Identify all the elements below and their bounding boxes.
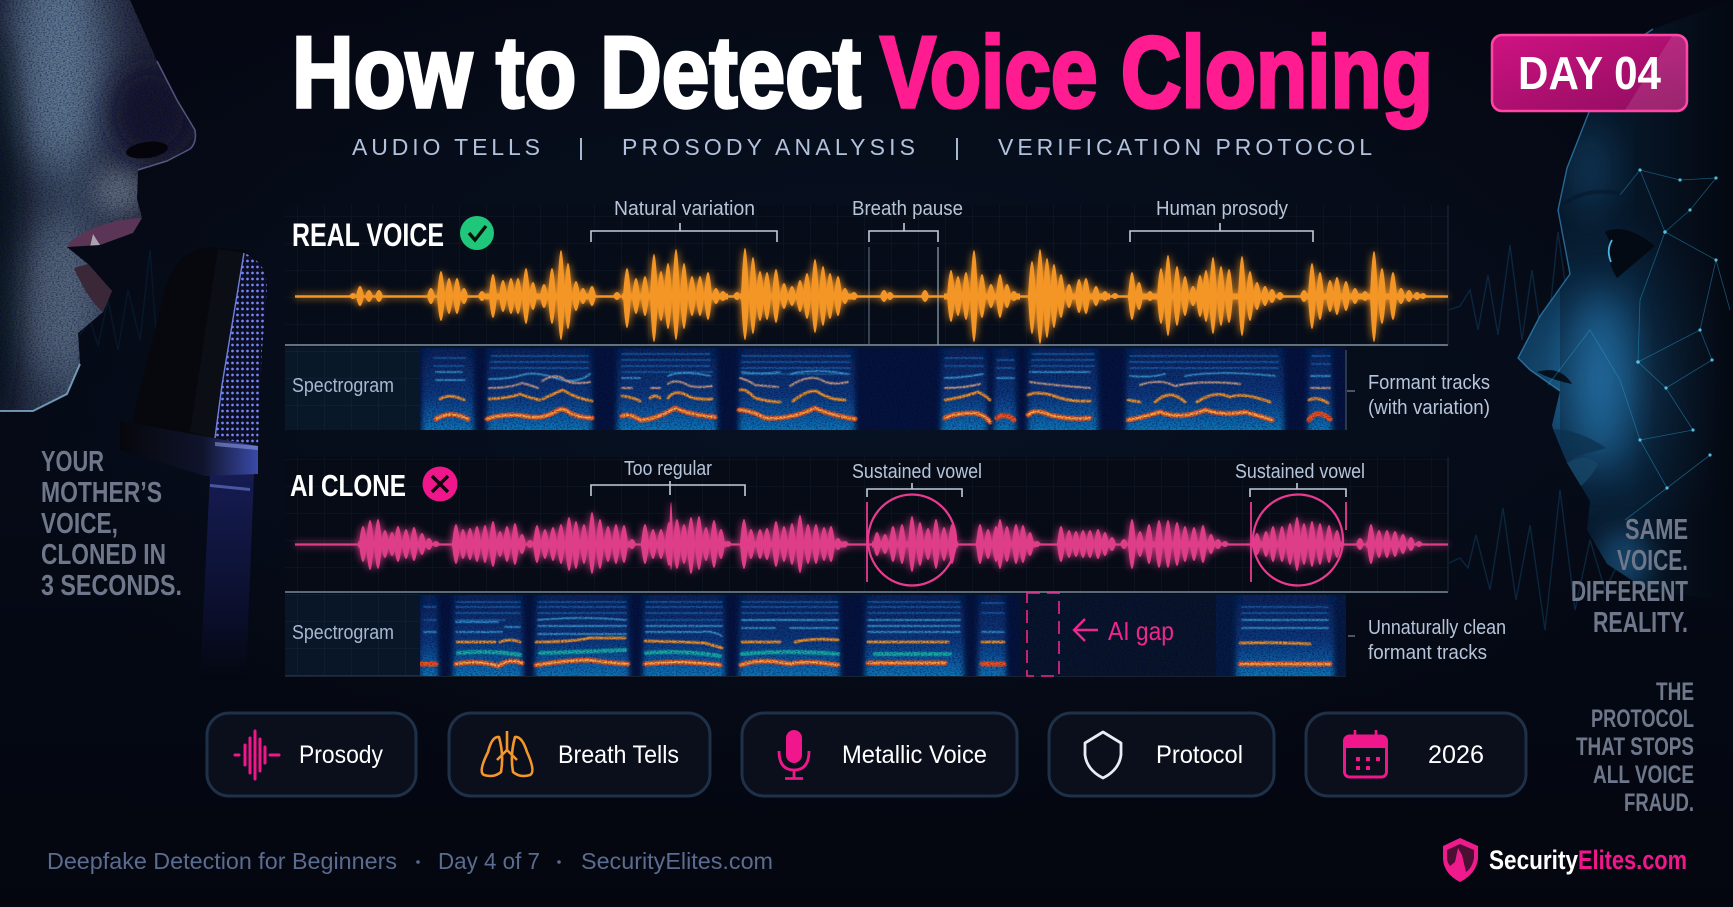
annotation: too regular [591, 458, 745, 496]
panel: AI clone [285, 457, 1506, 686]
brand logo: Elites.com [1578, 845, 1687, 875]
subtitle [352, 134, 1372, 160]
icon: microphone [779, 730, 809, 778]
icon: lungs [482, 731, 532, 776]
callout: AI gap: AI gap [1108, 616, 1174, 646]
pill: protocol: Protocol [1156, 741, 1243, 769]
pill: 2026 [1306, 713, 1526, 796]
pill: breath tells [449, 713, 710, 796]
title: Voice Cloning [880, 17, 1433, 129]
left portrait: speaking face [0, 0, 200, 430]
annotation: breath pause: Breath pause [852, 198, 963, 220]
highlight: sustained vowel circle one [867, 494, 956, 586]
panel: real voice [285, 198, 1490, 440]
pill: metallic voice: Metallic Voice [842, 741, 987, 769]
icon: upper lip [67, 218, 142, 247]
icon: nostril [126, 142, 168, 158]
title: How to Detect [292, 17, 861, 129]
annotation: too regular: Too regular [624, 458, 712, 480]
pill: breath tells: Breath Tells [558, 741, 679, 769]
left tagline: CLONED IN [41, 539, 166, 571]
right portrait: AI mesh face [1518, 0, 1733, 620]
left tagline: MOTHER’S [41, 477, 162, 509]
footer text: SecurityElites.com [581, 848, 773, 874]
footer text [47, 848, 773, 874]
callout: unnaturally clean formant tracks: Unnaturally clean [1368, 617, 1506, 639]
protocol note: THAT STOPS [1576, 733, 1694, 761]
annotation: sustained vowel one [852, 461, 982, 497]
protocol note: THE [1656, 678, 1694, 706]
right tagline: VOICE. [1617, 545, 1688, 577]
pill: protocol [1049, 713, 1274, 796]
icon: calendar [1344, 730, 1387, 777]
left tagline [41, 446, 182, 602]
icon: mouth opening [67, 233, 133, 264]
highlight: sustained vowel circle two [1251, 494, 1346, 586]
subtitle: | [578, 134, 584, 160]
annotation: natural variation: Natural variation [614, 198, 755, 220]
annotation: sustained vowel two: Sustained vowel [1235, 461, 1365, 483]
left tagline: VOICE, [41, 508, 118, 540]
annotation: breath pause [852, 198, 963, 345]
annotation: human prosody [1130, 198, 1313, 242]
protocol note: FRAUD. [1624, 789, 1694, 817]
badge: day 04: DAY 04 [1518, 47, 1661, 99]
waveform: real voice [295, 248, 1448, 344]
callout: unnaturally clean formant tracks [1348, 617, 1506, 664]
left tagline: 3 SECONDS. [41, 570, 182, 602]
right tagline [1571, 514, 1688, 639]
icon: brow [1570, 190, 1614, 201]
right tagline: SAME [1625, 514, 1688, 546]
spectrogram: real voice [420, 348, 1346, 430]
heading: AI clone: AI CLONE [290, 468, 406, 503]
footer text: Day 4 of 7 [438, 848, 540, 874]
callout: unnaturally clean formant tracks: formant tracks [1368, 642, 1487, 664]
pill: prosody [207, 713, 416, 796]
heading: real voice: REAL VOICE [292, 217, 444, 253]
icon: sound bars [235, 731, 279, 779]
protocol note: ALL VOICE [1593, 761, 1694, 789]
pill: metallic voice [742, 713, 1017, 796]
icon: lips [1553, 429, 1606, 458]
icon: eye [1605, 229, 1655, 278]
label: spectrogram: Spectrogram [292, 375, 394, 397]
footer text: Deepfake Detection for Beginners [47, 848, 397, 874]
ghost waveforms behind the panels [80, 232, 1640, 630]
icon: brand shield [1443, 838, 1478, 882]
subtitle: PROSODY ANALYSIS [622, 134, 915, 160]
pill: 2026: 2026 [1428, 741, 1484, 769]
subtitle: AUDIO TELLS [352, 134, 540, 160]
waveform: AI clone [295, 502, 1448, 574]
icon: nostril [1537, 370, 1572, 384]
microphone [120, 247, 267, 680]
mesh overlay [1548, 170, 1730, 520]
icon: shield [1085, 732, 1121, 778]
right tagline: REALITY. [1593, 607, 1688, 639]
icon: pink cross [422, 466, 458, 502]
protocol note [1576, 678, 1694, 817]
spectrogram: AI clone [420, 595, 1346, 676]
annotation: natural variation [591, 198, 777, 242]
brand logo [1443, 838, 1687, 882]
callout: AI gap [1027, 593, 1174, 676]
annotation: sustained vowel one: Sustained vowel [852, 461, 982, 483]
subtitle: VERIFICATION PROTOCOL [998, 134, 1372, 160]
icon: lower lip [74, 264, 112, 312]
annotation: human prosody: Human prosody [1156, 198, 1288, 220]
callout: formant tracks: Formant tracks [1368, 372, 1490, 394]
subtitle: | [954, 134, 960, 160]
callout: formant tracks: (with variation) [1368, 397, 1490, 419]
label: spectrogram: Spectrogram [292, 622, 394, 644]
badge: day 04 [1492, 35, 1687, 111]
title [292, 17, 1433, 129]
callout: formant tracks [1346, 350, 1490, 430]
annotation: sustained vowel two [1235, 461, 1365, 497]
protocol note: PROTOCOL [1591, 705, 1694, 733]
pill: prosody: Prosody [299, 741, 383, 769]
right tagline: DIFFERENT [1571, 576, 1688, 608]
brand logo: Security [1489, 845, 1578, 875]
left tagline: YOUR [41, 446, 104, 478]
icon: green check [460, 216, 494, 250]
